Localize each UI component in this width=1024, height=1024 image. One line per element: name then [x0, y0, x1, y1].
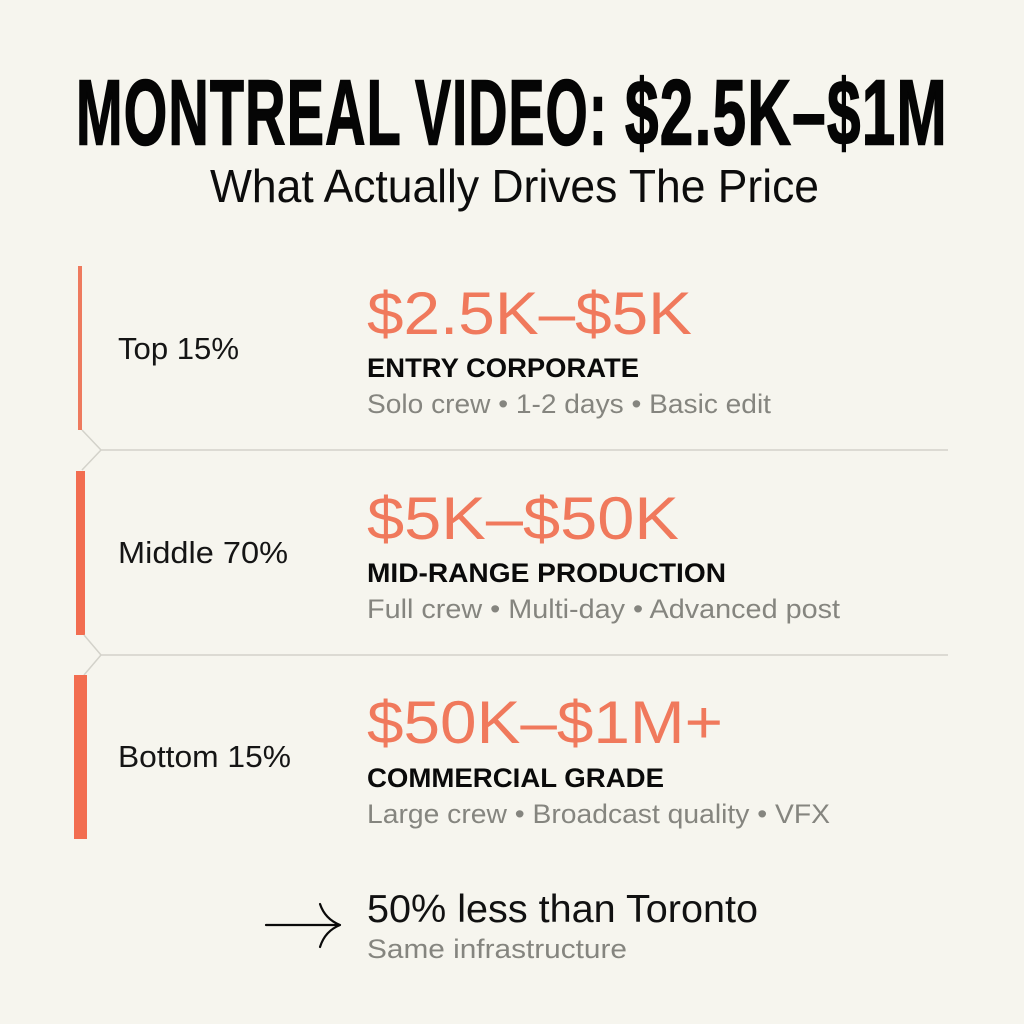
details: entry: Solo crew • 1-2 days • Basic edit — [367, 389, 772, 419]
details: mid-range: Full crew • Multi-day • Advanced post — [367, 594, 841, 624]
callout heading: 50% less than Toronto — [367, 888, 758, 931]
tier bar: middle — [76, 471, 85, 635]
percentile label: top 15%: Top 15% — [118, 331, 239, 366]
icon: arrow — [266, 904, 340, 947]
title — [76, 60, 948, 164]
divider: second — [84, 635, 948, 675]
tier name: commercial: COMMERCIAL GRADE — [367, 763, 664, 793]
tier name: entry: ENTRY CORPORATE — [367, 353, 639, 383]
tier: commercial grade — [74, 675, 830, 839]
price: commercial: $50K–$1M+ — [367, 689, 723, 756]
tier bar: bottom — [74, 675, 87, 839]
tier name: mid-range: MID-RANGE PRODUCTION — [367, 558, 726, 588]
subtitle: What Actually Drives The Price — [210, 160, 819, 212]
price: entry: $2.5K–$5K — [367, 280, 692, 347]
details: commercial: Large crew • Broadcast quality • VFX — [367, 799, 830, 829]
tier: entry corporate — [78, 266, 772, 430]
title: MONTREAL — [76, 60, 402, 164]
callout subtext: Same infrastructure — [367, 934, 627, 964]
percentile label: bottom 15%: Bottom 15% — [118, 739, 291, 774]
tier bar: top — [78, 266, 82, 430]
title: VIDEO: — [415, 60, 608, 164]
percentile label: middle 70%: Middle 70% — [118, 535, 288, 570]
tier: mid-range production — [76, 471, 841, 635]
divider: first — [82, 430, 948, 470]
price: mid-range: $5K–$50K — [367, 485, 679, 552]
